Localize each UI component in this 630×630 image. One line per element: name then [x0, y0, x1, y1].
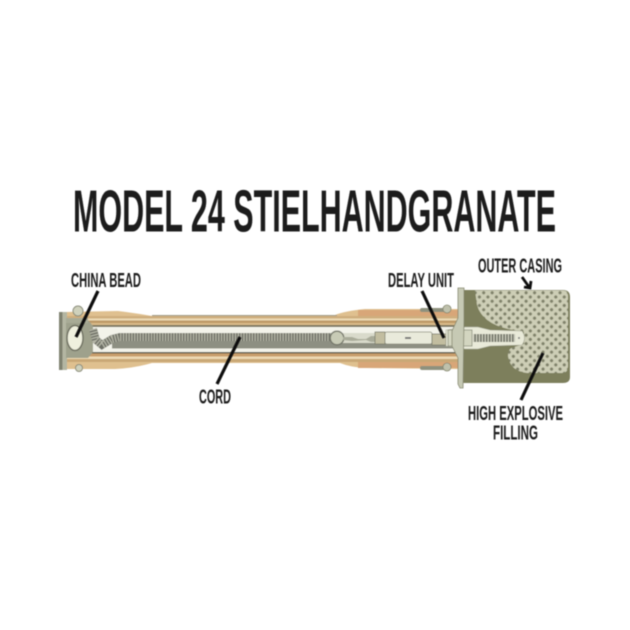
cord: [93, 329, 333, 345]
label: china bead: [71, 270, 141, 337]
label: high explosive filling: FILLING: [493, 422, 538, 444]
outer casing: [463, 290, 570, 383]
label: cord: [199, 337, 240, 408]
label: outer casing: [478, 256, 562, 288]
arrow: delay unit: [422, 291, 444, 338]
inner channel: [90, 327, 455, 352]
delay unit: [343, 332, 446, 345]
arrow: high explosive: [521, 353, 543, 400]
label: delay unit: [388, 270, 454, 338]
label: cord: CORD: [199, 386, 231, 408]
label: high explosive filling: [468, 353, 563, 444]
high explosive filling: [475, 290, 568, 373]
arrow: china bead: [76, 291, 98, 337]
china bead: [67, 326, 83, 350]
arrow: outer casing: [522, 277, 531, 288]
label: delay unit: DELAY UNIT: [388, 270, 454, 292]
wooden handle: [66, 309, 458, 369]
label: china bead: CHINA BEAD: [71, 270, 141, 292]
cord ball: [330, 331, 344, 345]
end cap: [59, 306, 93, 372]
grenade cutaway illustration: [59, 288, 570, 388]
label: outer casing: OUTER CASING: [478, 256, 562, 278]
arrow: cord: [217, 337, 240, 384]
fuze housing: [446, 327, 524, 349]
flange: [420, 288, 464, 388]
